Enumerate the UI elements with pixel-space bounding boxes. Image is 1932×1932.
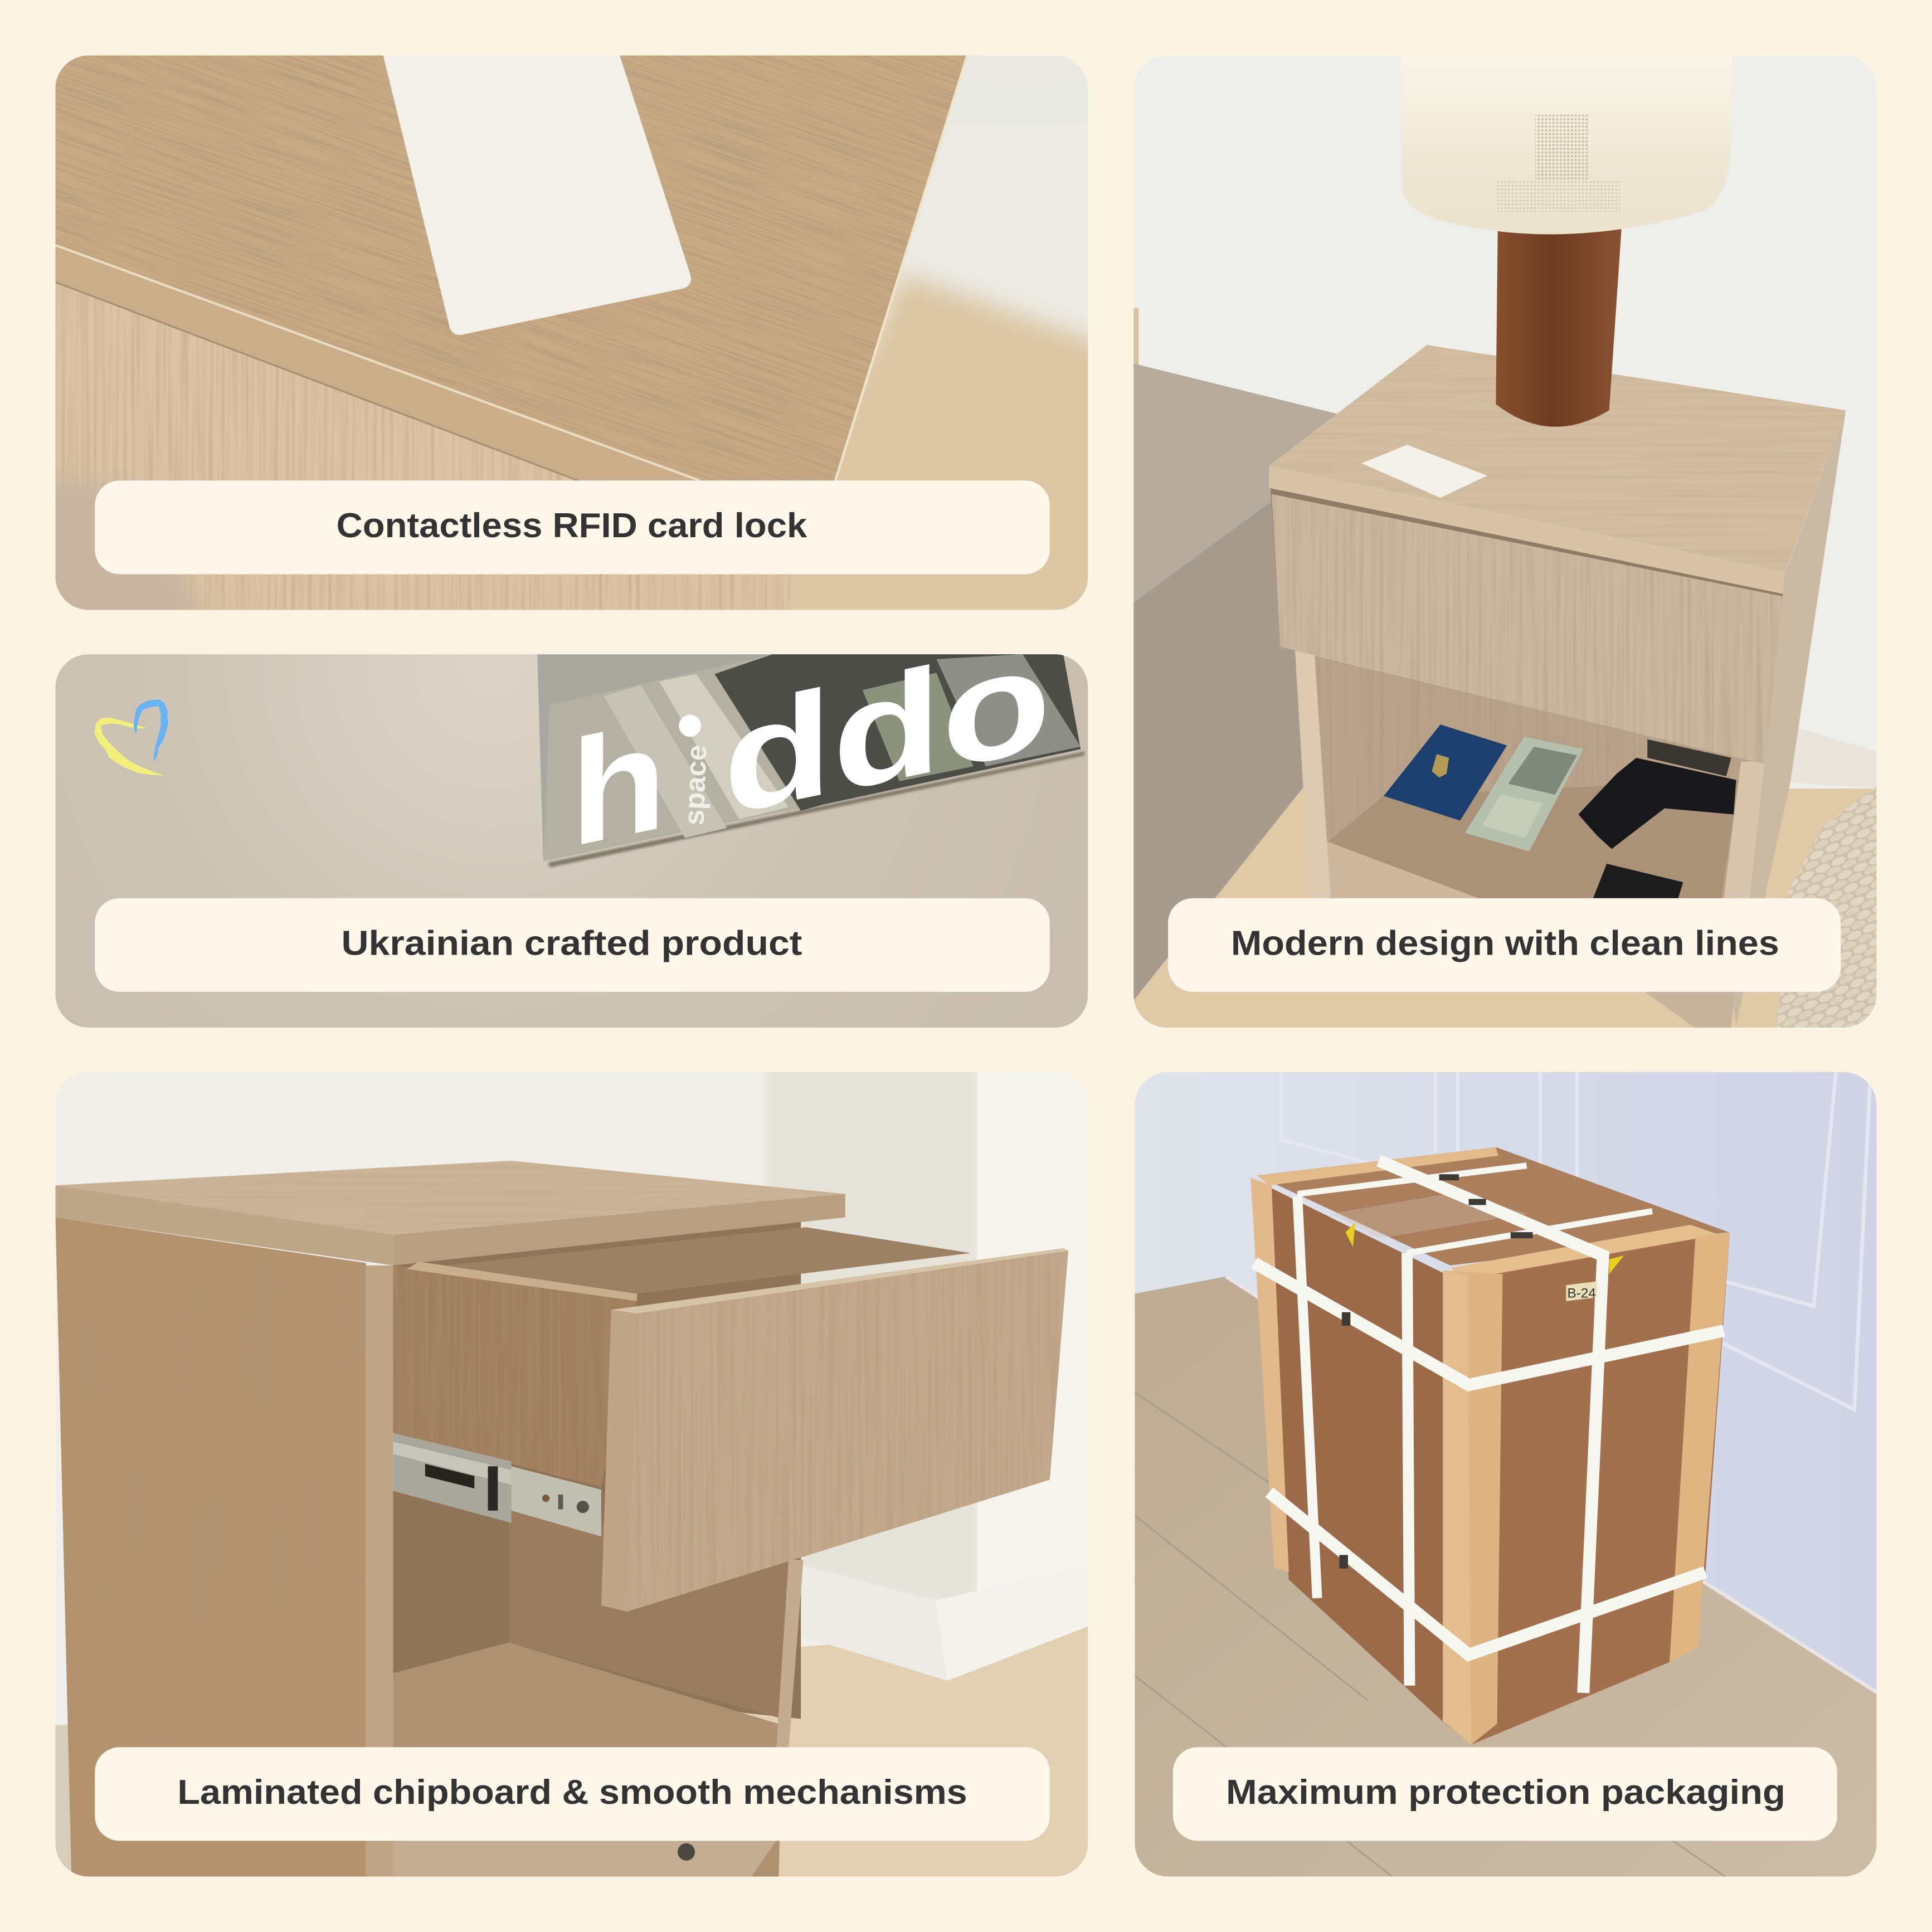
panel: Laminated chipboard <box>55 1060 1088 1877</box>
cabinet side <box>55 1218 393 1877</box>
label: B-24: B-24 <box>1568 1286 1596 1301</box>
sofa ottoman <box>1133 363 1343 1000</box>
panel: RFID card lock <box>0 0 1493 1087</box>
caption pill: Contactless RFID card lock <box>337 507 807 545</box>
RFID card <box>383 55 691 335</box>
open drawer <box>393 1227 1068 1612</box>
black pouch <box>1593 864 1683 898</box>
icon: Ukrainian heart <box>95 699 168 776</box>
brochure: h <box>571 692 666 878</box>
RFID card <box>1361 445 1487 498</box>
passport <box>1384 724 1507 821</box>
photo: hiddo brochure on beige surface <box>56 654 1088 1028</box>
strap clips <box>1339 1174 1533 1569</box>
brochure <box>537 654 1081 862</box>
photo: packed crate <box>1135 1072 1878 1877</box>
caption pill: Maximum protection packaging <box>1226 1773 1785 1812</box>
caption pill <box>95 480 1050 574</box>
cabinet top <box>55 1161 845 1266</box>
white straps <box>1254 1161 1724 1693</box>
panel: Ukrainian crafted product <box>56 654 1088 1028</box>
brochure: ddo <box>723 612 1051 847</box>
banknotes <box>1465 737 1583 851</box>
drawer slide <box>393 1433 601 1536</box>
crate <box>1250 1147 1730 1745</box>
lamp <box>1401 55 1733 427</box>
caption pill: Ukrainian crafted product <box>341 924 802 963</box>
caption pill <box>1173 1747 1837 1841</box>
brochure: space <box>678 744 713 826</box>
photo: nightstand with open drawer <box>55 1060 1088 1877</box>
handgun <box>1578 758 1736 849</box>
caption pill: Laminated chipboard & smooth mechanisms <box>177 1773 967 1812</box>
interior <box>393 1220 801 1719</box>
panel: Maximum protection packaging <box>1135 1072 1878 1877</box>
caption pill <box>95 898 1050 992</box>
panel: Modern design <box>1133 55 1877 1028</box>
caption pill <box>95 1747 1050 1841</box>
caption pill: Modern design with clean lines <box>1231 924 1779 963</box>
caption pill <box>1168 898 1841 992</box>
lock plate <box>1647 739 1731 776</box>
photo: nightstand top with RFID card <box>56 56 1088 610</box>
knitted pouf <box>1777 786 1877 1028</box>
nightstand <box>1269 345 1846 1028</box>
photo: nightstand with lamp and hidden compartment <box>1133 55 1877 1028</box>
